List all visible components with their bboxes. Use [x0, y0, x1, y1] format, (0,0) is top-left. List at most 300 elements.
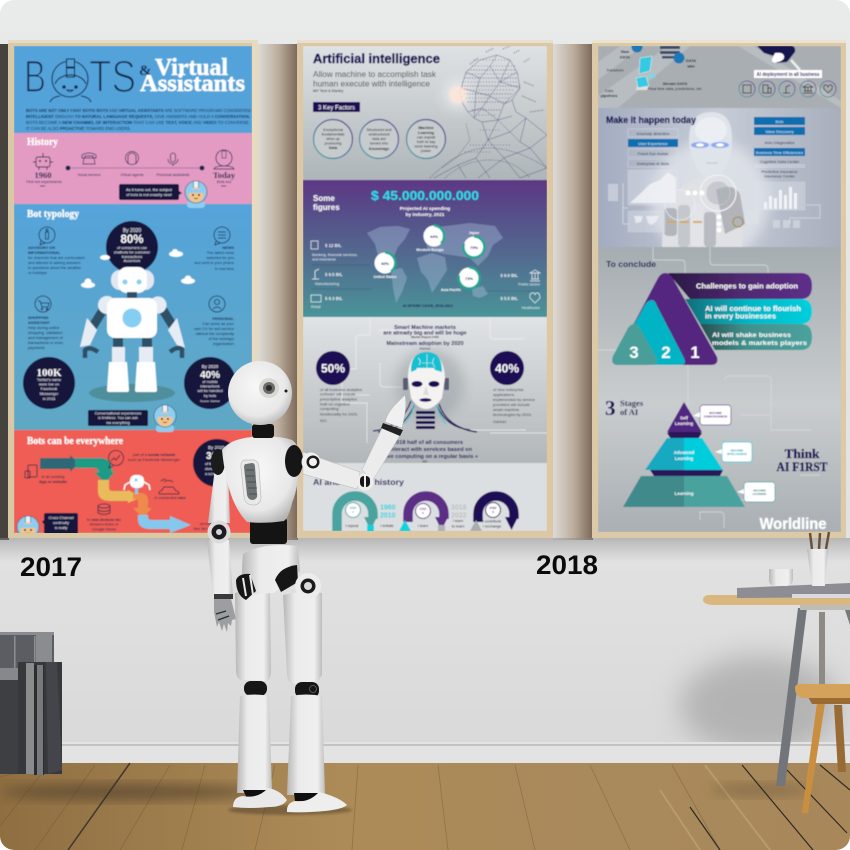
factor circle: machine learning: both to say [417, 140, 435, 144]
donut: 70 percent japan [463, 231, 484, 258]
milestone: today [213, 150, 236, 186]
dates: 1960 to 2010: 1960 [380, 504, 396, 512]
figures list right [486, 270, 541, 310]
text: news [194, 245, 234, 271]
section: some figures background [303, 180, 547, 317]
text: personal [194, 316, 235, 346]
text: app or website: App or website [39, 479, 68, 484]
donut: 40 percent united states: 40% [381, 261, 389, 266]
milestone: virtual agents: Virtual agents [120, 173, 144, 177]
factor circle: knowledge: unstructured [368, 132, 390, 136]
text: news: The latest news [207, 250, 234, 255]
title BOTS: TS [89, 51, 136, 102]
text: new devices: In new devices like [87, 517, 121, 522]
arc: step 2 learn: I learn [418, 524, 428, 528]
callout: conversational experience: me everything [106, 421, 130, 425]
stat circle: 50 percent [316, 351, 350, 385]
text: 50 percent detail: prescriptive analytics [320, 396, 357, 402]
text: advisory or informational: ADVISORY OR [28, 245, 55, 250]
text: shopping assistant: shopping, validation [28, 330, 62, 335]
icon: connected car: In connected cars [154, 495, 186, 500]
chart: bar chart [755, 182, 805, 210]
heading: 3 stages of AI: Stages [620, 398, 644, 408]
pyramid: self learning: Self [680, 416, 689, 420]
donut: 44 percent western europe: Western Europe [416, 248, 444, 252]
text: 50 percent detail: IDC [320, 418, 327, 423]
stat circle: 40 percent: will be handled [197, 389, 223, 393]
arc: step 2 learn [399, 496, 448, 532]
section: markets background [303, 317, 547, 464]
callout: machine intelligence [715, 442, 752, 462]
conclusion: stacked triangles [612, 273, 717, 365]
text: advisory or informational: for channels that are curriculated [28, 255, 85, 260]
figures list right: Public sector [518, 282, 541, 286]
conclusion: stacked triangles: 3 [629, 343, 639, 362]
label: AI deployment in all business: AI deployment in all business [756, 72, 820, 78]
robot thighs [235, 590, 322, 684]
arc: step 3 contribute: 3 [492, 510, 494, 514]
conclusion: stacked triangles: 2 [661, 343, 671, 362]
text: social network [128, 452, 181, 462]
callout: machine learning [737, 482, 775, 502]
year label 2018: 2018 [536, 550, 598, 580]
stat circle: 40 percent: 40% [200, 370, 220, 381]
text: new devices: Google Home [92, 526, 116, 532]
heading: some figures [313, 194, 340, 212]
stat circle: 40 percent: By 2020 [202, 364, 219, 369]
text: data labels: Stream DATA [663, 81, 687, 86]
heading: bots can be everywhere: Bots can be everywhere [27, 436, 124, 447]
callout: machine consciousness [693, 405, 731, 425]
pyramid: advanced learning: Learning [675, 456, 693, 461]
text: data labels: DATA [686, 58, 696, 63]
robot head [228, 361, 292, 425]
heading: 3 stages of AI [605, 396, 644, 420]
text: personal: PERSONAL [212, 316, 235, 321]
stat circle: 80 percent: of consumers use [117, 246, 147, 250]
figures list left: $ 9.5 BIL [325, 272, 343, 277]
text: data labels: Raw [621, 49, 630, 54]
icon: screens [636, 56, 656, 90]
frame 2017 [8, 40, 258, 538]
robot torso [222, 436, 299, 523]
quote: half of all consumers [369, 440, 478, 464]
buttons left: Anomaly detection [637, 131, 669, 136]
stat circle: 40 percent gartner: 40% [495, 362, 519, 376]
robot neck [252, 424, 274, 438]
donut: 73 percent asia pacific [441, 267, 480, 292]
pyramid: advanced learning: Advanced [674, 450, 695, 455]
icon: smart device [98, 504, 110, 514]
text: new devices [87, 517, 121, 532]
figures list left: Retail [311, 305, 321, 309]
title ampersand and virtual assistants [139, 56, 246, 92]
robot knees [244, 681, 319, 698]
world map [367, 223, 503, 303]
subtitle: MIT Tech & Stanley [313, 89, 343, 93]
figures list left: $ 9.3 BIL [325, 296, 343, 301]
text: advisory or informational [28, 245, 85, 275]
quote: half of all consumers: will interact with services based on [377, 447, 473, 453]
stat circle: 40 percent: Source: Gartner [200, 399, 220, 403]
milestone: personal assistants: Personal assistants [157, 173, 190, 177]
diagonal light bands [598, 46, 841, 108]
panel: bots and virtual assistants 2017 [14, 46, 252, 543]
buttons left: Enterprise AI Bots [637, 161, 669, 166]
milestone: vocal servers [78, 153, 100, 177]
stat circle: 30 percent [193, 439, 241, 487]
text: app or website: In an existing [42, 474, 64, 479]
icon: social network [108, 450, 124, 468]
figures list right: Healthcare [522, 306, 540, 310]
heading: 3 stages of AI: 3 [605, 396, 616, 420]
robot pointing arm [285, 395, 406, 490]
icon: connected car [154, 479, 186, 500]
text: 40 percent detail: providers will include [493, 402, 531, 407]
callout: cross channel: continuity [53, 521, 69, 525]
section: bot typology background [14, 204, 252, 430]
dates: 2018 to 2022: to learn [452, 524, 464, 528]
section: intro background [14, 46, 252, 134]
text: personal bots: personal bots [200, 521, 224, 526]
text: shopping assistant: transactions or even [28, 340, 63, 345]
text: data labels: DATA [620, 54, 630, 60]
callout: not exactly new [119, 184, 182, 200]
panel: make it happen 2018 [598, 42, 841, 533]
chart: area chart [628, 170, 678, 205]
intro text [26, 108, 252, 131]
buttons right: Cognitive Data Center [760, 159, 800, 164]
factor circle: data: producing [325, 142, 341, 146]
figures list left: Manufacturing [315, 282, 339, 286]
heading: bot typology: Bot typology [27, 209, 79, 220]
illustration: dark hand [757, 46, 800, 70]
arc: step 3 contribute [470, 496, 518, 531]
section: make it happen image background [598, 108, 841, 247]
buttons right [754, 117, 805, 178]
buttons right: Business Time Efficiencies [756, 150, 803, 155]
buttons right: Bots [775, 119, 784, 124]
conclusion: teal bar: AI will shake business [712, 332, 791, 339]
milestone: today: Today [213, 170, 236, 180]
donut: 40 percent united states: United States [374, 275, 396, 279]
stat circle: 40 percent [184, 357, 236, 409]
text: social network: part of a social network [133, 452, 176, 457]
stat circle: 30 percent: done without [205, 467, 227, 471]
section: conclusion background [598, 247, 841, 532]
milestone: vocal servers: Vocal servers [78, 173, 100, 177]
caption: projected AI spending [400, 206, 450, 218]
milestone: today: Bots era [217, 180, 232, 184]
icon: mini flying robot [124, 475, 150, 494]
shadow between frames two and three [553, 44, 593, 540]
text: 40 percent detail: smart machine [493, 407, 520, 412]
dates: 2018 to 2022: I learn [453, 519, 463, 523]
pyramid: learning: Learning [674, 491, 694, 496]
frame 2018 left [297, 40, 553, 538]
icon: personal chat [209, 296, 225, 312]
stat circle: 80 percent: 80% [120, 234, 144, 246]
figures list right: $ 9.9 BIL [500, 273, 518, 278]
figures list right: $ 5.5 BIL [500, 296, 518, 301]
callout: cross channel [42, 513, 78, 535]
milestone: 1960 [26, 153, 62, 186]
decorative HUD connectors [623, 183, 820, 224]
figures list left: and insurance [312, 258, 336, 262]
dates: 1960 to 2010 [380, 504, 396, 528]
stat circle: 100K: 100K [36, 367, 62, 379]
title ampersand and virtual assistants: & [139, 63, 152, 79]
text: 50 percent detail: computing [320, 406, 338, 411]
icon: mascot typology [154, 405, 176, 432]
text: app or website [39, 474, 68, 484]
heading: smart machine markets: Market Report 2025 [411, 335, 439, 339]
factor circle: machine learning [406, 120, 446, 158]
callout: conversational experience: Conversational experiences [95, 412, 142, 416]
donut: 44 percent western europe [416, 226, 444, 252]
arrow ribbon [40, 455, 191, 533]
section: history background [14, 133, 252, 204]
text: advisory or informational: and tailored to asking answers [28, 260, 81, 265]
heading: 3 stages of AI: of AI [620, 407, 639, 417]
heading: smart machine markets: are already big and will be huge [383, 330, 467, 336]
figures list left [311, 241, 372, 309]
text: social network: such as Facebook Messenger [128, 457, 181, 462]
callout: machine intelligence: MACHINE [731, 448, 743, 452]
text: shopping assistant: and management of [28, 335, 64, 340]
factor circle: machine learning: Learning [418, 131, 435, 135]
text: 40 percent detail: technologies by 2015, [493, 412, 532, 417]
callout: not exactly new: of bots is not exactly new! [126, 192, 172, 197]
conclusion: stacked triangles: 1 [690, 343, 700, 362]
section: history background [303, 463, 547, 531]
circuit lines [598, 247, 820, 528]
factor circle: machine learning: power [421, 149, 432, 153]
heading: smart machine markets: Smart Machine markets [394, 325, 456, 331]
figures list left: Banking, financial services, [312, 253, 358, 257]
arc: step 2 learn: STEP [420, 507, 427, 511]
factor circle: knowledge: Knowledge [369, 147, 389, 151]
subtitle: human execute with intelligence [313, 80, 431, 88]
stat circle: 30 percent: of browsing [205, 462, 224, 466]
stat circle: 100K: Messenger [40, 392, 59, 396]
robot figure [207, 361, 406, 812]
milestone: 1960: 1960 [34, 170, 52, 180]
arc: step 3 contribute: STEP [490, 506, 497, 510]
text: data labels [601, 49, 702, 98]
dates: 1960 to 2010: 2010 [380, 512, 396, 520]
stat circle: 80 percent [106, 221, 158, 273]
donut: 73 percent asia pacific: Asia Pacific [441, 288, 461, 292]
factor circle: machine learning: can exploit [417, 136, 436, 140]
caption: AI spend CAGR: AI SPEND CAGR, 2016-2021 [403, 304, 453, 308]
panel: artificial intelligence 2018 [303, 46, 550, 532]
conclusion: teal bar: models & markets players [712, 340, 807, 347]
title BOTS [26, 60, 134, 92]
text: personal bots: like Siri, Alexa, Bixby [194, 526, 230, 531]
text: 50 percent detail: of all business analytics [320, 387, 362, 392]
robot waist [250, 518, 287, 544]
text: 50 percent detail: built on cognitive [320, 402, 351, 406]
dates: 1960 to 2010: I imitate [380, 524, 394, 528]
text: data labels: Data [605, 88, 614, 93]
callout: conversational experience [88, 410, 148, 426]
callout: cross channel: Cross Channel [48, 516, 74, 520]
intro text: INTELLIGENT ENOUGH TO NATURAL LANGUAGE REQUESTS, GIVE ANSWERS AND HOLD A CONVERSATION. [26, 114, 250, 119]
year label 2017: 2017 [20, 552, 82, 582]
text: data labels: pipelines [601, 93, 617, 98]
buttons left: User Experience [638, 141, 669, 146]
heading: smart machine markets: Gartner [420, 346, 431, 350]
text: 50 percent detail: software will include [320, 392, 356, 396]
buttons left [628, 129, 678, 167]
callout: machine intelligence: INTELLIGENCE [727, 452, 747, 456]
title ampersand and virtual assistants: Virtual [155, 55, 228, 81]
shadow between frames one and two [258, 44, 298, 540]
icon: raw data server [632, 42, 684, 64]
conclusion: purple bar: Challenges to gain adoption [696, 282, 798, 290]
label: 3 key factors: 3 Key Factors [318, 105, 355, 111]
title: artificial intelligence: Artificial intelligence [313, 51, 440, 66]
icon: news chat [214, 227, 230, 245]
arc: step 1 repeat: STEP [350, 506, 357, 510]
skirting board [62, 742, 850, 763]
text: new devices: Amazon Echo or [90, 522, 119, 526]
clouds [81, 249, 195, 288]
milestone: personal assistants [157, 153, 190, 177]
icons: industries row [739, 81, 836, 97]
heading: some figures: figures [313, 203, 340, 212]
text: personal: without the complexity [196, 331, 234, 336]
stool [795, 684, 850, 813]
slogan: think AI first: Think [784, 446, 820, 461]
slogan: think AI first [776, 446, 828, 474]
title ampersand and virtual assistants: Assistants [140, 71, 245, 97]
stat circle: 50 percent: 50% [321, 362, 345, 376]
arc: step 1 repeat: 1 [352, 510, 354, 514]
stat circle: 100K: Facebook [41, 387, 57, 391]
arc: step 1 repeat [337, 496, 377, 532]
subtitle: Allow machine to accomplish task [313, 70, 437, 79]
icon: shopping chat [35, 296, 51, 312]
logo: worldline: Worldline [760, 516, 827, 533]
callout: conversational experience: is limitless. You can ask [98, 416, 138, 420]
icon: mascot history [185, 181, 207, 208]
stat circle: 80 percent: chatbots for customer [114, 250, 151, 254]
robot shadow on floor [228, 805, 352, 815]
factor circle: knowledge: turned into [370, 142, 388, 146]
buttons right: Insurance Center [764, 174, 796, 178]
conclusion: cyan bar: AI will continue to flourish [705, 306, 801, 313]
conclusion: cyan bar [685, 299, 812, 324]
text: personal: organization [213, 341, 234, 346]
stat circle: 40 percent gartner [490, 351, 524, 385]
text: news: in real time [215, 266, 234, 271]
pyramid: self learning [667, 402, 702, 439]
figures list left: $ 12 BIL [325, 243, 342, 248]
pencil holder [807, 532, 829, 586]
stat circle: 100K: were live on [39, 382, 59, 386]
text: shopping assistant: SHOPPING [28, 315, 49, 320]
factor circle: data [314, 120, 352, 158]
icon: title robot head [50, 59, 91, 102]
factor circle: data: drive up [326, 137, 340, 141]
callout: machine learning: LEARNING [752, 492, 767, 496]
donut: 70 percent japan: Japan [469, 231, 479, 235]
text: shopping assistant: payments [28, 345, 45, 350]
callout: machine consciousness: MACHINE [709, 411, 722, 415]
text: 40 percent detail [493, 387, 536, 424]
donut: 44 percent western europe: 44% [430, 234, 438, 239]
icon: mascot everywhere [17, 516, 39, 543]
shadow left of first frame [0, 44, 9, 540]
heading: smart machine markets [383, 325, 467, 350]
big figure: $ 45.000.000.000 [371, 189, 479, 203]
conclusion: cyan bar: in every businesses [705, 314, 776, 320]
text: 50 percent detail [320, 387, 362, 423]
label: 3 key factors [313, 102, 360, 112]
conclusion: teal bar [700, 324, 812, 350]
text: 40 percent detail: applications [493, 392, 514, 397]
heading: history: History [27, 137, 58, 148]
HUD boxes [608, 184, 800, 228]
buttons left: Fraud Eye Avatar [638, 151, 669, 156]
conclusion: purple bar [668, 273, 812, 299]
stat circle: 80 percent: Accenture [123, 259, 141, 263]
text: 50 percent detail: functionality for 2020, [320, 412, 358, 416]
text: 40 percent detail: of new enterprise [493, 387, 524, 392]
arc: step 1 repeat: I repeat [346, 524, 359, 528]
milestone: virtual agents [120, 152, 144, 177]
text: 40 percent detail: implemented by service [493, 397, 536, 402]
dates: 2018 to 2022: 2018 [451, 504, 467, 512]
text: shopping assistant [28, 315, 64, 350]
arc: step 2 learn: 2 [422, 511, 424, 515]
factor circle: knowledge: Structured and [367, 128, 391, 132]
stat circle: 40 percent: by bots [204, 394, 216, 398]
stat circle: 100K: in 2016 [43, 397, 55, 401]
text: personal: Can serve as your [202, 321, 235, 326]
buttons right: Predictive Insurance [761, 169, 798, 174]
dark books left [0, 632, 62, 775]
buttons right: Value Discovery [765, 129, 794, 134]
cup on table [769, 569, 793, 586]
glow on face [449, 86, 467, 104]
icon: phone [25, 465, 37, 478]
title BOTS: B [24, 51, 46, 102]
dates: 2018 to 2022: 2022 [451, 512, 467, 520]
intro text: IT CAN BE ALSO PROACTIVE TOWARD END USERS. [26, 126, 131, 131]
donut: 70 percent japan: 70% [470, 245, 478, 250]
callout: machine consciousness: CONSCIOUSNESS [704, 414, 727, 418]
stat circle: 100K: Twitter's name [37, 378, 61, 382]
caption: projected AI spending: by industry, 2021 [406, 212, 445, 218]
text: 40 percent detail: Gartner [493, 419, 507, 424]
text: data labels: Real time data, predictions, etc [648, 86, 702, 91]
pyramid: advanced learning [645, 438, 723, 476]
section: deployment background [598, 46, 841, 109]
timeline [66, 166, 204, 170]
illustration: big robot [80, 267, 185, 402]
text: advisory or informational: or holidays [28, 270, 47, 275]
text: news: NEWS [222, 245, 234, 250]
donut: 73 percent asia pacific: 73% [465, 276, 473, 281]
table [703, 583, 850, 786]
text: news: and sent to your phone [194, 260, 234, 265]
stat circle: 80 percent: transactions [122, 255, 142, 259]
text: personal bots [194, 521, 230, 531]
stat circle: 30 percent: a screen [205, 472, 220, 476]
